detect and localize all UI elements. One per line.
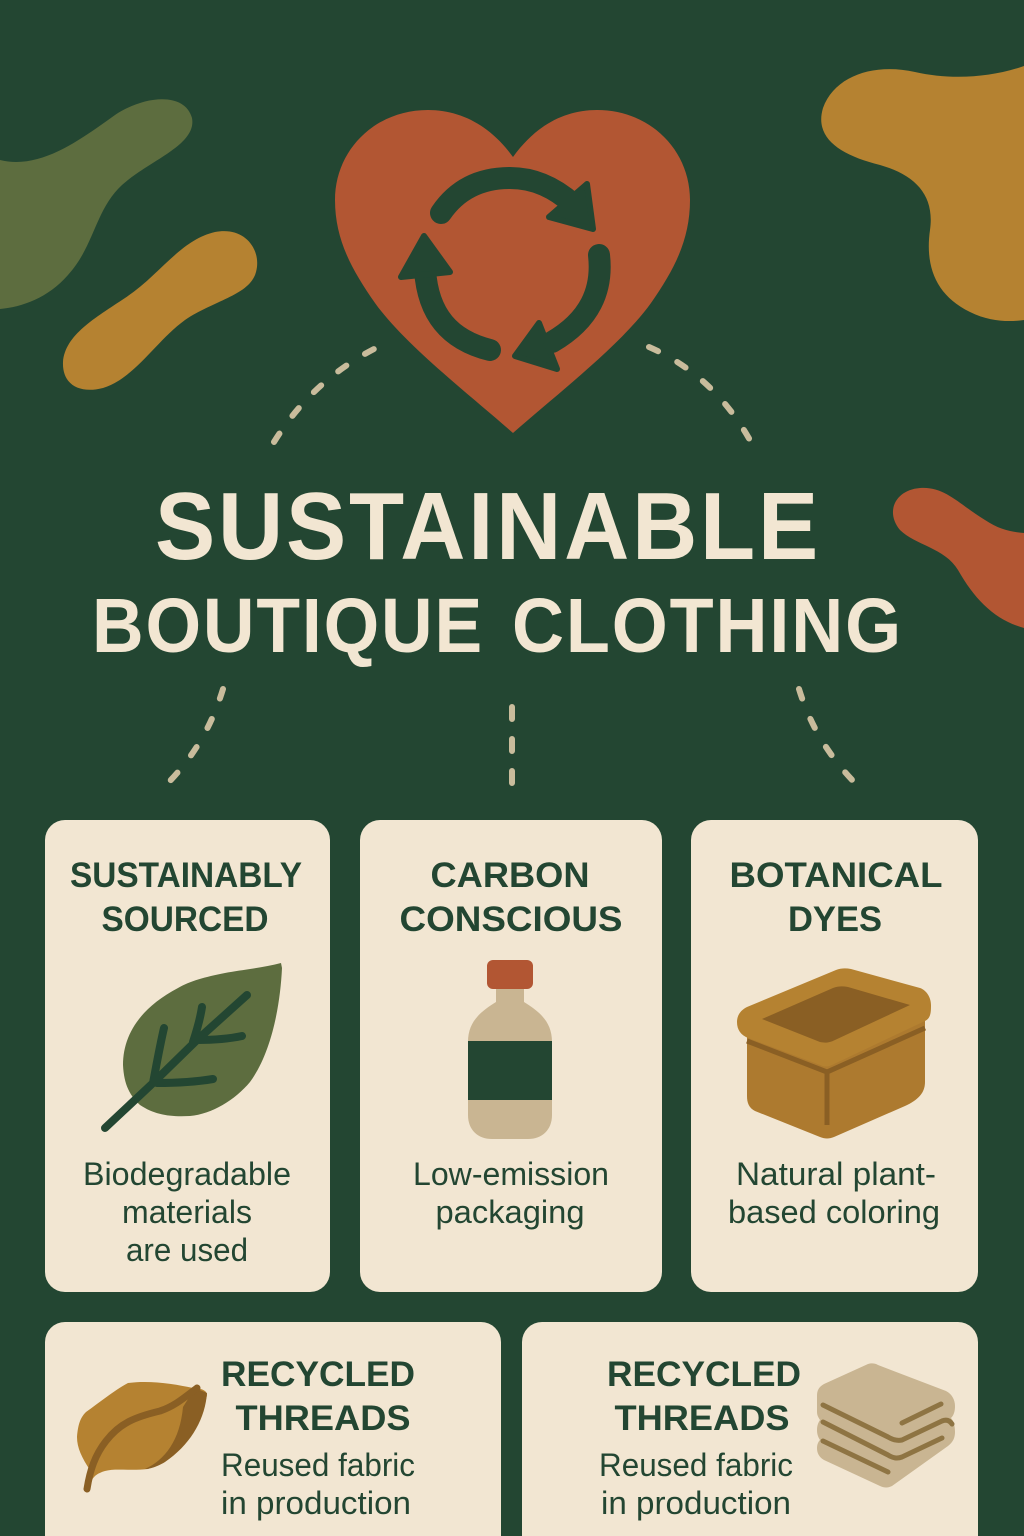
panel: sustainably sourced: SOURCED <box>102 900 268 939</box>
icon: folded fabric <box>817 1363 955 1488</box>
title: CLOTHING <box>512 583 903 669</box>
icon: leaf <box>105 963 282 1128</box>
blob: rust right <box>893 488 1024 628</box>
heading: RECYCLED <box>221 1355 415 1394</box>
heading: SUSTAINABLY <box>70 856 302 895</box>
dashed arc: upper right <box>649 347 751 442</box>
dashed arc: lower right <box>799 689 855 783</box>
title: SUSTAINABLE <box>155 473 821 580</box>
icon: heart with recycling arrows <box>335 110 690 433</box>
icon: brown leaf <box>77 1382 207 1489</box>
dashed arc: upper left <box>274 346 380 442</box>
title <box>92 473 903 669</box>
arrow: right <box>515 255 600 369</box>
icon: bottle <box>468 960 552 1139</box>
dashed arc: lower center <box>509 707 515 783</box>
text: Reused fabric <box>221 1447 415 1483</box>
panel: recycled threads right: in production <box>601 1485 791 1521</box>
panel: recycled threads left: THREADS <box>236 1399 410 1438</box>
dashed arc: lower left <box>168 689 223 783</box>
text: Reused fabric <box>599 1447 793 1483</box>
arrow: top <box>441 178 593 229</box>
panel: botanical dyes: DYES <box>788 900 882 939</box>
text: Low-emission <box>413 1156 609 1192</box>
panel: botanical dyes: based coloring <box>728 1194 940 1230</box>
panel: recycled threads left <box>45 1322 501 1536</box>
text: Natural plant- <box>736 1156 936 1192</box>
blob: ochre top right <box>821 66 1024 321</box>
panel: sustainably sourced <box>45 820 330 1292</box>
panel: carbon conscious: packaging <box>436 1194 584 1230</box>
blob: olive top left <box>0 99 192 309</box>
panel: carbon conscious: CONSCIOUS <box>400 900 622 939</box>
blob: ochre capsule left <box>63 231 257 390</box>
panel: sustainably sourced: are used <box>126 1232 248 1268</box>
heading: BOTANICAL <box>730 856 942 895</box>
arrow: left <box>401 236 490 350</box>
heading: CARBON <box>430 856 590 895</box>
panel: recycled threads left: in production <box>221 1485 411 1521</box>
icon: box <box>737 968 931 1138</box>
panel: botanical dyes <box>691 820 978 1292</box>
title: BOUTIQUE <box>92 583 484 669</box>
panel: recycled threads right <box>522 1322 978 1536</box>
text: Biodegradable <box>83 1156 291 1192</box>
panel: recycled threads right: THREADS <box>614 1399 790 1438</box>
panel: carbon conscious <box>360 820 662 1292</box>
heading: RECYCLED <box>607 1355 801 1394</box>
panel: sustainably sourced: materials <box>122 1194 252 1230</box>
